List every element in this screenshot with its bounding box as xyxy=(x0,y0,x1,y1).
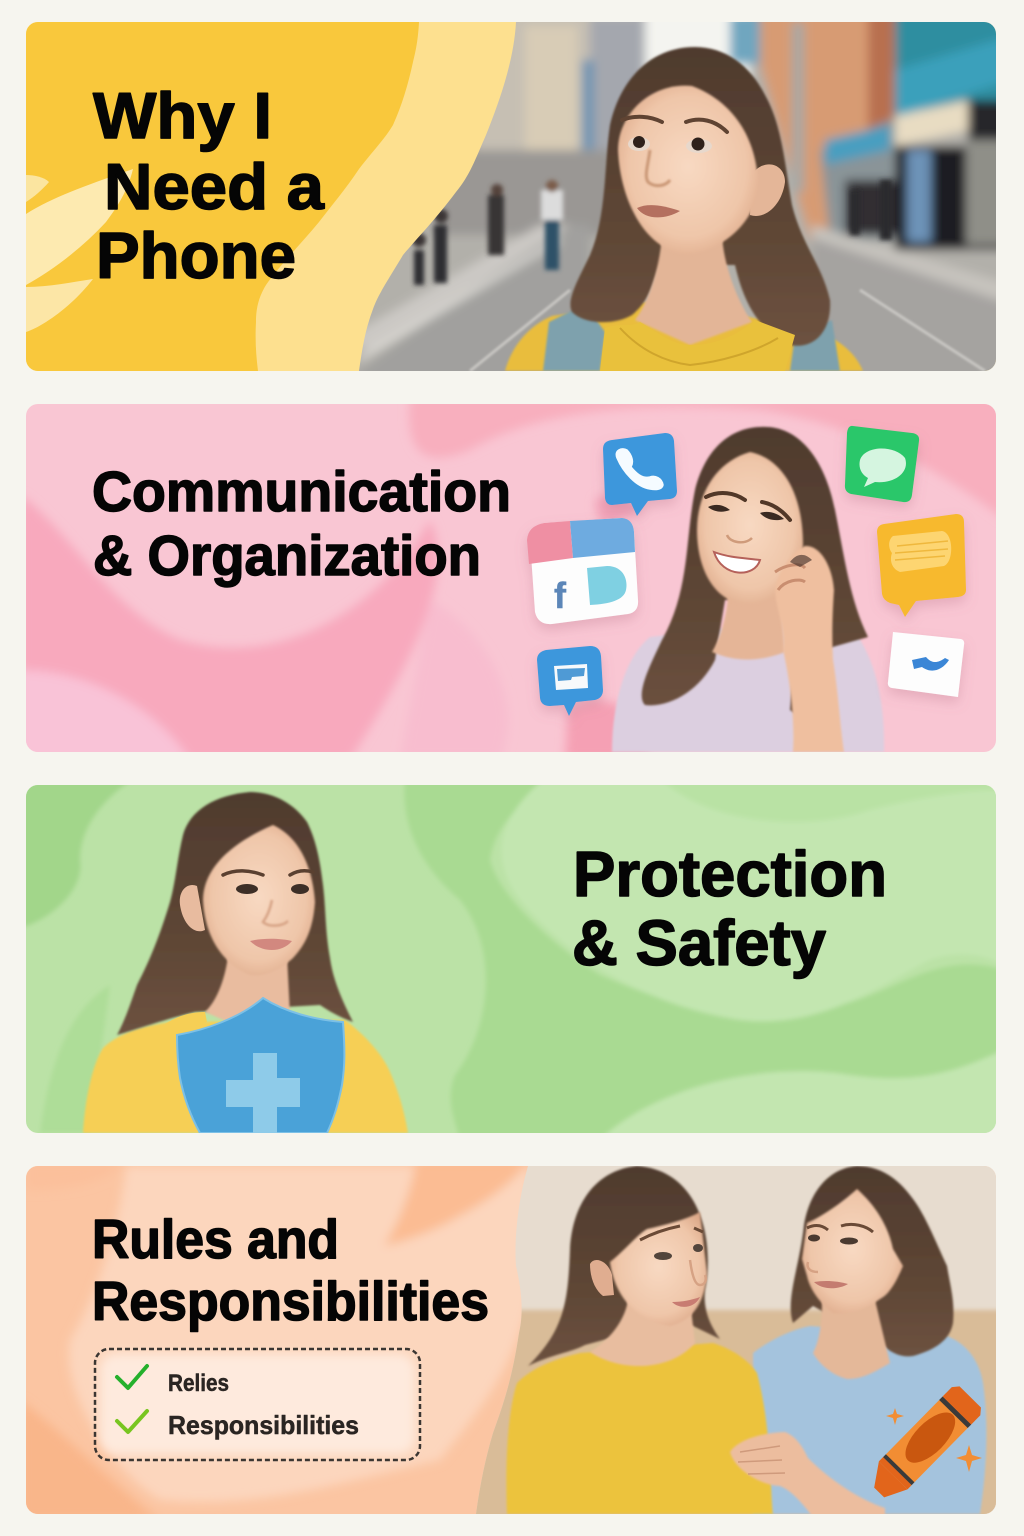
heading: Protection & Safety: & Safety xyxy=(572,907,826,979)
checklist box xyxy=(95,1349,420,1460)
girl looking up xyxy=(505,47,863,371)
title: Why I Need a Phone xyxy=(92,90,326,280)
icon: orange crayon with sparkles xyxy=(874,1386,982,1498)
check: Relies xyxy=(117,1366,229,1397)
street photo background xyxy=(359,22,996,371)
icon: small blue bubble xyxy=(537,646,603,716)
mother in blue xyxy=(753,1166,986,1514)
heading: Protection & Safety: Protection xyxy=(573,838,887,910)
icon: app card with f and D xyxy=(527,518,638,624)
title: Why I Need a Phone: Why I xyxy=(93,79,272,152)
icon: yellow chat xyxy=(877,514,966,617)
yellow paint background xyxy=(26,22,419,371)
heading: Communication & Organization: & Organization xyxy=(93,524,481,588)
icon: phone bubble xyxy=(603,433,677,516)
icon: green chat xyxy=(845,426,919,502)
girl with shield xyxy=(83,792,408,1133)
living room photo xyxy=(476,1166,996,1514)
heading: Communication & Organization: Communication xyxy=(92,460,511,524)
girl in yellow xyxy=(506,1166,773,1514)
check: Relies: Relies xyxy=(168,1370,229,1397)
icon: white card with blue arrow xyxy=(888,632,964,697)
blurred pedestrians xyxy=(412,180,892,285)
icon: app card with f and D: f xyxy=(554,575,567,616)
panel: communication and organization xyxy=(20,395,1005,760)
panel: why I need a phone xyxy=(26,22,996,371)
icon: blue shield xyxy=(177,998,344,1133)
girl on phone xyxy=(612,427,884,752)
mother's hand xyxy=(730,1432,885,1516)
panel: rules and responsibilities xyxy=(20,1160,1010,1530)
check: Responsibilities: Responsibilities xyxy=(168,1410,359,1440)
title: Why I Need a Phone: Need a xyxy=(104,150,325,223)
heading: Rules and Responsibilities: Responsibilities xyxy=(92,1270,489,1332)
title: Why I Need a Phone: Phone xyxy=(96,219,296,292)
app icons xyxy=(527,426,966,716)
panel: protection and safety xyxy=(20,778,1003,1140)
green paint background xyxy=(20,778,1003,1140)
pink paint background xyxy=(20,395,1005,760)
peach paint background xyxy=(20,1160,530,1520)
heading: Rules and Responsibilities xyxy=(92,1208,489,1332)
heading: Rules and Responsibilities: Rules and xyxy=(92,1208,339,1270)
heading: Protection & Safety xyxy=(572,838,887,979)
heading: Communication & Organization xyxy=(92,460,511,588)
